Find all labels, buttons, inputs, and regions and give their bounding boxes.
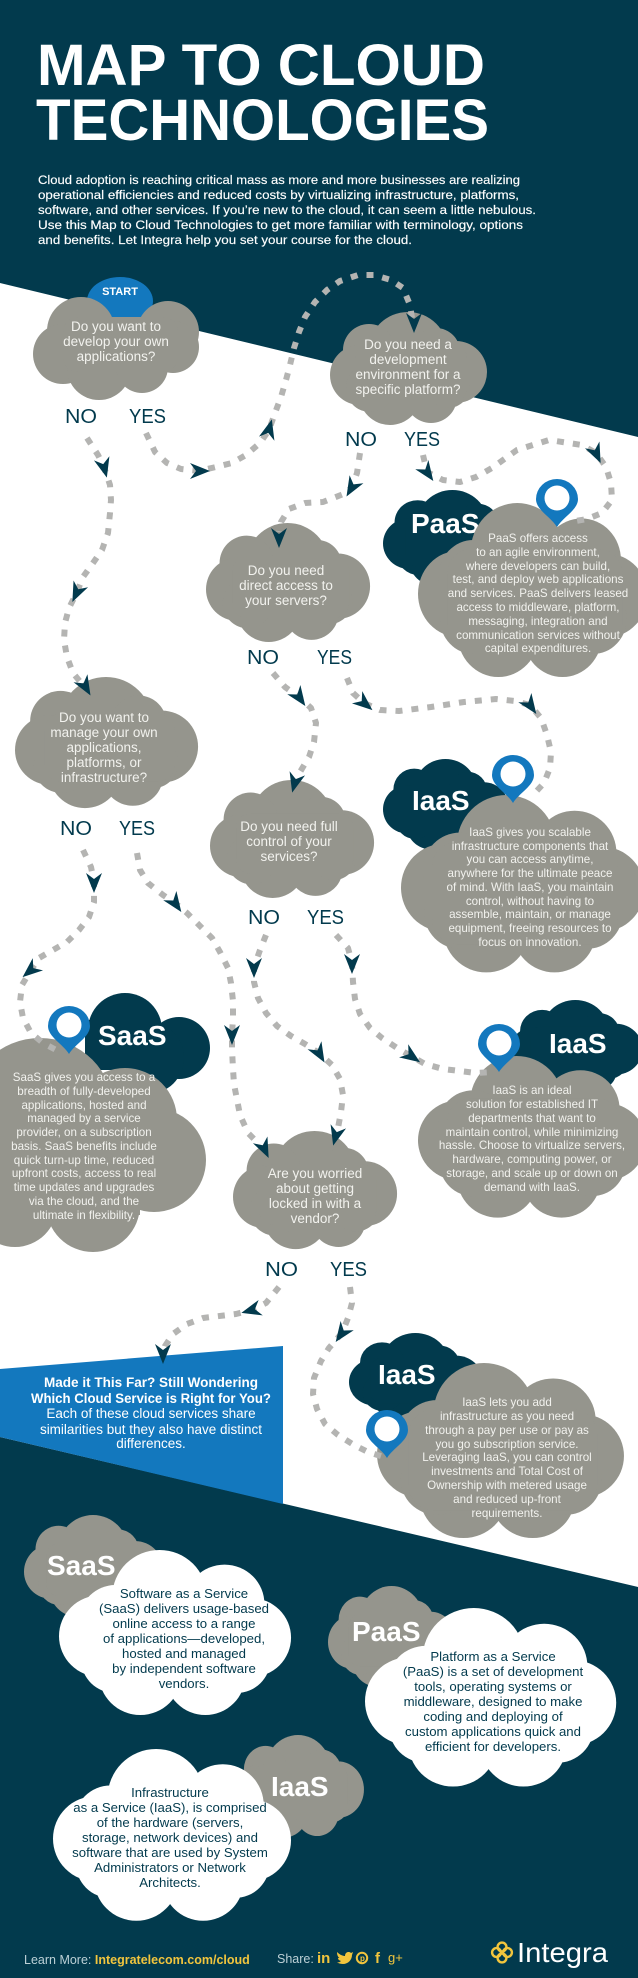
answers: develop applications: NO: [65, 406, 97, 428]
answers: development environment: YES: [404, 429, 440, 451]
PaaS definition: (PaaS) is a set of development: [403, 1664, 583, 1679]
answers: manage your own: [60, 818, 155, 840]
icon: IaaS map pin 3: [366, 1410, 408, 1458]
PaaS description: communication services without: [456, 629, 621, 642]
IaaS description cloud: [418, 1056, 638, 1218]
SaaS definition: (SaaS) delivers usage-based: [99, 1601, 269, 1616]
logo rings: [492, 1943, 512, 1962]
IaaS navy cloud: [383, 759, 509, 849]
question: full control: control of your: [246, 834, 332, 849]
PaaS description: messaging, integration and: [468, 615, 608, 628]
question: develop applications: [33, 297, 199, 400]
IaaS definition: software that are used by System: [72, 1845, 268, 1860]
logo wordmark: Integra: [517, 1937, 608, 1968]
answers: develop applications: [65, 406, 166, 428]
definition: PaaS: [328, 1586, 616, 1787]
title: [36, 33, 489, 153]
question: direct access: your servers?: [245, 593, 327, 608]
PaaS description: to an agile environment,: [476, 546, 600, 559]
SaaS description: breadth of fully-developed: [17, 1085, 151, 1098]
SaaS description: ultimate in flexibility.: [33, 1209, 135, 1222]
SaaS definition: hosted and managed: [122, 1646, 246, 1661]
question: vendor lock-in: Are you worried: [268, 1166, 362, 1181]
path: develop YES to development environment: [146, 275, 412, 471]
IaaS definition: Architects.: [139, 1875, 201, 1890]
answers: full control: YES: [307, 907, 344, 929]
intro text: Cloud adoption is reaching critical mass as more and more businesses are realizing: [38, 173, 520, 187]
footer: social icons: in: [317, 1950, 330, 1967]
SaaS description: basis. SaaS benefits include: [11, 1140, 157, 1153]
intro text: Use this Map to Cloud Technologies to get more familiar with terminology, options: [38, 218, 523, 232]
IaaS description: control, without having to: [466, 895, 594, 908]
question: manage your own: [15, 677, 198, 808]
question: vendor lock-in: vendor?: [291, 1211, 339, 1226]
intro text: and benefits. Let Integra help you set your course for the cloud.: [38, 233, 412, 247]
path: development YES to PaaS: [423, 440, 612, 522]
footer: social icons: [317, 1950, 403, 1967]
path: direct NO to full control: [273, 673, 316, 780]
IaaS navy cloud: [349, 1333, 482, 1421]
footer: learn more: Learn More: Integratelecom.com/cloud: [24, 1953, 250, 1967]
question: manage your own: Do you want to: [59, 710, 149, 725]
question: development environment: Do you need a: [364, 337, 452, 352]
question: development environment: environment for a: [355, 367, 461, 382]
PaaS definition: custom applications quick and: [405, 1724, 581, 1739]
icon: IaaS map pin: [492, 755, 534, 803]
IaaS description: investments and Total Cost of: [431, 1465, 584, 1478]
PaaS description: test, and deploy web applications: [453, 573, 624, 586]
question: manage your own: manage your own: [50, 725, 158, 740]
SaaS definition: by independent software: [112, 1661, 256, 1676]
callout text: Each of these cloud services share: [46, 1406, 256, 1421]
PaaS description cloud: [418, 503, 638, 677]
IaaS definition: of the hardware (servers,: [97, 1815, 243, 1830]
footer: share label: Share:: [277, 1952, 314, 1966]
PaaS definition: coding and deploying of: [423, 1709, 563, 1724]
question: development environment: specific platform?: [355, 382, 461, 397]
IaaS description: demand with IaaS.: [484, 1181, 580, 1194]
SaaS description: SaaS gives you access to a: [13, 1071, 156, 1084]
IaaS description: storage, and scale up or down on: [446, 1167, 618, 1180]
start badge: START: [102, 286, 138, 298]
IaaS description: departments that want to: [468, 1112, 596, 1125]
path: direct YES to IaaS: [347, 678, 551, 795]
IaaS description: assemble, maintain, or manage: [449, 908, 611, 921]
background: white map area: [0, 283, 638, 1587]
SaaS description: provider, on a subscription: [16, 1126, 152, 1139]
PaaS navy cloud: [383, 490, 523, 586]
arrows along the paths: [17, 313, 608, 1364]
IaaS description: Leveraging IaaS, you can control: [422, 1451, 592, 1464]
answers: vendor lock-in: YES: [330, 1259, 367, 1281]
intro text: software, and other services. If you’re new to the cloud, it can seem a little nebulous.: [38, 203, 536, 217]
IaaS definition: storage, network devices) and: [82, 1830, 258, 1845]
callout text: [31, 1375, 271, 1451]
path: manage NO to SaaS: [20, 850, 94, 1051]
SaaS description: applications, hosted and: [21, 1099, 147, 1112]
answers: manage your own: NO: [60, 818, 92, 840]
IaaS description: you go subscription service.: [435, 1438, 579, 1451]
SaaS white cloud: [59, 1550, 291, 1715]
question: develop applications: applications?: [77, 349, 155, 364]
IaaS definition: as a Service (IaaS), is comprised: [73, 1800, 267, 1815]
IaaS definition: Infrastructure: [131, 1785, 209, 1800]
PaaS definition: middleware, designed to make: [404, 1694, 582, 1709]
PaaS label: PaaS: [411, 508, 480, 539]
IaaS description: maintain control, while minimizing: [446, 1126, 618, 1139]
definition: SaaS: [24, 1515, 291, 1715]
callout text: Made it This Far? Still Wondering: [44, 1375, 258, 1390]
answers: develop applications: YES: [129, 406, 166, 428]
IaaS description: solution for established IT: [466, 1098, 598, 1111]
intro text: operational efficiencies and reduced costs by virtualizing infrastructure, platforms,: [38, 188, 519, 202]
IaaS description cloud: [377, 1363, 624, 1538]
SaaS label: SaaS: [98, 1020, 166, 1051]
IaaS description cloud: [401, 795, 638, 972]
question: full control: [210, 780, 374, 898]
PaaS description: where developers can build,: [465, 560, 610, 573]
answers: vendor lock-in: NO: [265, 1259, 298, 1281]
result: IaaS pay per use: [349, 1333, 624, 1538]
PaaS gray cloud: [328, 1586, 456, 1687]
IaaS description: infrastructure as you need: [440, 1410, 574, 1423]
result: SaaS: [0, 993, 210, 1252]
IaaS description: anywhere for the ultimate peace: [448, 867, 612, 880]
callout text: differences.: [116, 1436, 186, 1451]
IaaS description: hardware, computing power, or: [452, 1153, 612, 1166]
IaaS description: you can access anytime,: [467, 853, 593, 866]
answers: development environment: [345, 429, 440, 451]
IaaS description: and reduced up-front: [453, 1493, 562, 1506]
path: full control NO to vendor: [254, 935, 343, 1128]
title: TECHNOLOGIES: [36, 88, 489, 153]
PaaS description: PaaS offers access: [488, 532, 588, 545]
blue callout panel: [0, 1346, 283, 1504]
SaaS description: time updates and upgrades: [14, 1181, 154, 1194]
IaaS gray cloud: [233, 1735, 364, 1838]
SaaS description: quick turn-up time, reduced: [14, 1154, 154, 1167]
question: vendor lock-in: about getting: [276, 1181, 354, 1196]
PaaS definition: efficient for developers.: [425, 1739, 561, 1754]
PaaS definition: tools, operating systems or: [414, 1679, 572, 1694]
question: direct access: Do you need: [248, 563, 324, 578]
answers: full control: [248, 907, 344, 929]
icon: PaaS map pin: [536, 479, 578, 527]
SaaS description: via the cloud, and the: [29, 1195, 139, 1208]
intro text: [38, 173, 536, 247]
footer: social icons: p: [360, 1954, 365, 1963]
IaaS description: IaaS gives you scalable: [469, 826, 591, 839]
SaaS label: SaaS: [47, 1550, 116, 1581]
result: IaaS ideal: [418, 1000, 638, 1218]
result: PaaS: [383, 490, 638, 677]
callout text: Which Cloud Service is Right for You?: [31, 1391, 271, 1406]
SaaS navy cloud: [85, 993, 210, 1094]
IaaS description: IaaS lets you add: [462, 1396, 552, 1409]
IaaS description: IaaS is an ideal: [492, 1084, 572, 1097]
answers: manage your own: YES: [119, 818, 155, 840]
PaaS description: access to middleware, platform,: [456, 601, 620, 614]
SaaS definition: online access to a range: [113, 1616, 255, 1631]
PaaS definition: Platform as a Service: [430, 1649, 556, 1664]
answers: direct access: NO: [247, 647, 279, 669]
definition: IaaS: [53, 1735, 364, 1921]
PaaS description: and services. PaaS delivers leased: [448, 587, 628, 600]
IaaS description: of mind. With IaaS, you maintain: [447, 881, 613, 894]
question: manage your own: infrastructure?: [61, 770, 147, 785]
answers: vendor lock-in: [265, 1259, 367, 1281]
question: manage your own: platforms, or: [66, 755, 142, 770]
question: full control: services?: [260, 849, 318, 864]
question: manage your own: applications,: [66, 740, 142, 755]
IaaS label: IaaS: [271, 1771, 329, 1802]
footer: social icons: g+: [388, 1950, 403, 1965]
SaaS description: managed by a service: [27, 1112, 141, 1125]
IaaS description: requirements.: [472, 1507, 542, 1520]
SaaS definition: of applications—developed,: [103, 1631, 265, 1646]
SaaS gray cloud: [24, 1515, 163, 1617]
footer: social icons: f: [375, 1950, 381, 1967]
question: develop applications: develop your own: [63, 334, 169, 349]
question: direct access: [206, 523, 370, 642]
IaaS label: IaaS: [549, 1028, 607, 1059]
IaaS description: equipment, freeing resources to: [448, 922, 612, 935]
path: vendor NO to callout: [163, 1287, 279, 1353]
path: full control YES to IaaS: [336, 935, 492, 1073]
icon: SaaS map pin: [48, 1006, 90, 1054]
IaaS description: through a pay per use or pay as: [425, 1424, 589, 1437]
IaaS navy cloud: [509, 1000, 638, 1093]
path: manage YES to vendor: [137, 853, 258, 1143]
question: vendor lock-in: [233, 1131, 397, 1249]
answers: direct access: [247, 647, 352, 669]
question: develop applications: Do you want to: [71, 319, 161, 334]
title: MAP TO CLOUD: [37, 33, 485, 98]
IaaS definition: Administrators or Network: [94, 1860, 246, 1875]
question: full control: Do you need full: [240, 819, 338, 834]
icon: IaaS map pin 2: [478, 1024, 520, 1072]
IaaS description: Ownership with metered usage: [427, 1479, 587, 1492]
IaaS label: IaaS: [378, 1359, 436, 1390]
question: vendor lock-in: locked in with a: [269, 1196, 362, 1211]
path: vendor YES to IaaS: [313, 1287, 384, 1457]
PaaS description: capital expenditures.: [485, 642, 591, 655]
PaaS label: PaaS: [352, 1616, 420, 1647]
answers: full control: NO: [248, 907, 280, 929]
SaaS definition: vendors.: [159, 1676, 209, 1691]
SaaS definition: Software as a Service: [120, 1586, 248, 1601]
SaaS description: upfront costs, access to real: [12, 1167, 156, 1180]
IaaS description: hassle. Choose to virtualize servers,: [439, 1139, 625, 1152]
IaaS description: focus on innovation.: [478, 936, 582, 949]
Integra logo: [492, 1937, 608, 1968]
IaaS label: IaaS: [412, 785, 470, 816]
question: development environment: [330, 312, 487, 425]
answers: direct access: YES: [317, 647, 352, 669]
question: direct access: direct access to: [239, 578, 333, 593]
path: development NO to direct access: [279, 453, 360, 532]
path: develop NO to manage: [64, 438, 111, 684]
answers: development environment: NO: [345, 429, 377, 451]
IaaS white cloud: [53, 1749, 291, 1921]
callout text: similarities but they also have distinct: [40, 1422, 262, 1437]
IaaS description: infrastructure components that: [452, 840, 609, 853]
PaaS white cloud: [365, 1608, 616, 1787]
question: development environment: development: [369, 352, 447, 367]
SaaS description cloud: [0, 1038, 206, 1252]
start badge: [87, 277, 153, 325]
result: IaaS scalable: [383, 759, 638, 972]
